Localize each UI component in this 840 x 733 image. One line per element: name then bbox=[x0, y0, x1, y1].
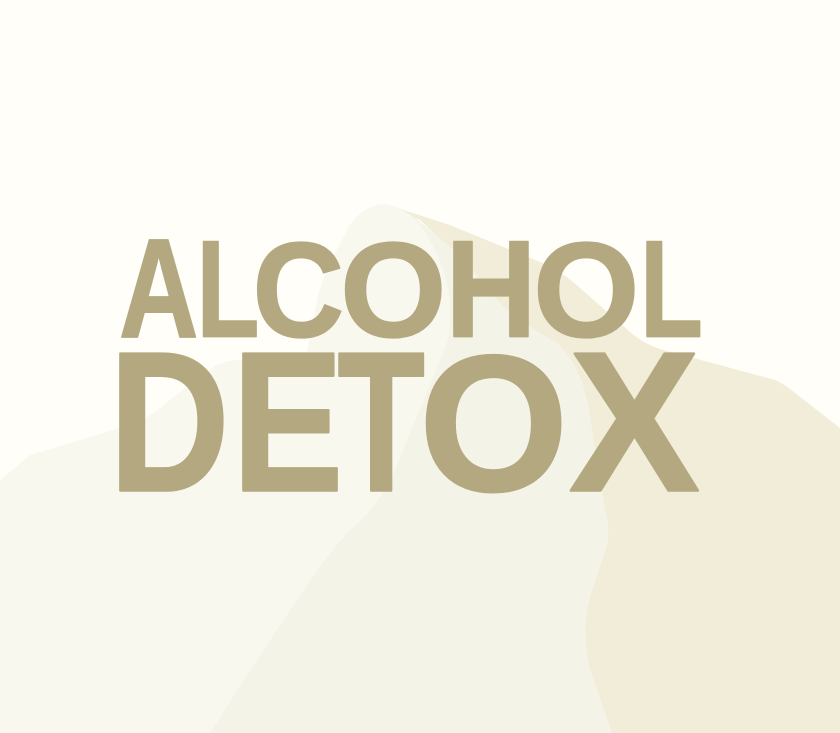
title line: DETOX: T bbox=[338, 310, 425, 533]
title line: ALCOHOL bbox=[119, 210, 703, 367]
title line: ALCOHOL: C bbox=[252, 214, 344, 365]
mountain: right layer bbox=[385, 204, 840, 733]
title line: ALCOHOL: L bbox=[196, 212, 259, 366]
title bbox=[109, 210, 703, 533]
title line: DETOX: E bbox=[232, 311, 343, 533]
title line: DETOX: O bbox=[419, 315, 568, 532]
title line: DETOX: D bbox=[109, 311, 230, 533]
title line: ALCOHOL: H bbox=[446, 212, 536, 367]
title line: ALCOHOL: L bbox=[640, 212, 703, 366]
title line: DETOX: X bbox=[569, 310, 700, 533]
title line: DETOX bbox=[109, 310, 700, 533]
title line: ALCOHOL: O bbox=[533, 214, 640, 365]
title line: ALCOHOL: A bbox=[119, 210, 198, 367]
title line: ALCOHOL: O bbox=[340, 214, 447, 365]
mountain: left layer bbox=[0, 204, 450, 733]
mountain: middle layer bbox=[205, 204, 612, 733]
